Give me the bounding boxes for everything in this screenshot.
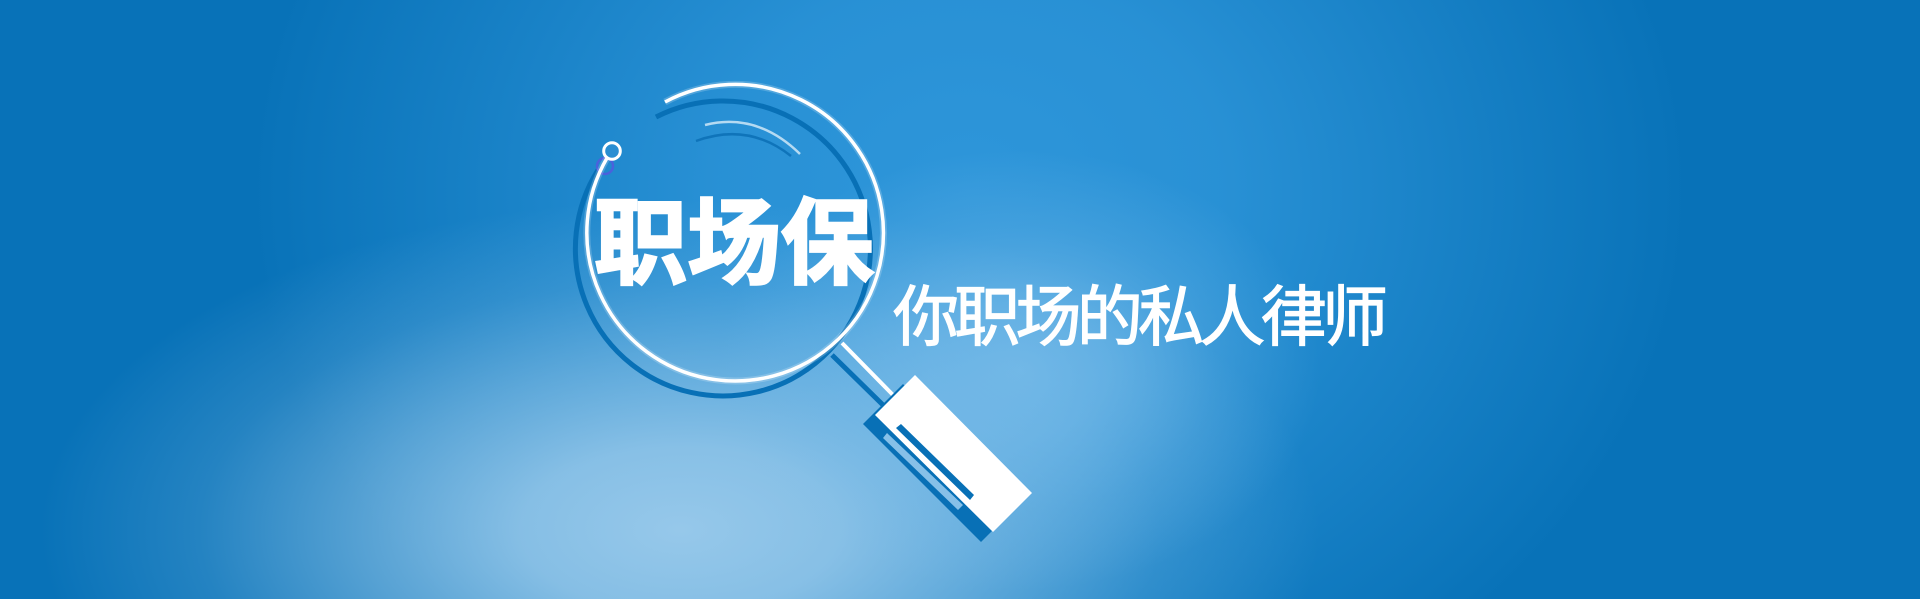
magnifying glass [575, 84, 1032, 542]
lens: inner highlight arc, blue [696, 134, 791, 156]
blue small ring [597, 158, 613, 174]
handle: light slot [883, 433, 963, 510]
slogan: 你职场的私人律师 [893, 280, 1388, 354]
handle: blue shaft [832, 355, 883, 405]
lens: inner highlight arc, white [705, 122, 800, 154]
lens: soft glow under white arc [587, 84, 883, 381]
handle: white shaft [842, 343, 893, 395]
handle: blue grip shadow [863, 384, 1021, 542]
handle: blue slot [896, 424, 974, 500]
white small ring [604, 143, 620, 159]
lens: blue arc [575, 101, 870, 396]
lens: white arc [587, 84, 883, 381]
title: 职场保 [594, 191, 874, 296]
handle: white grip [875, 375, 1032, 532]
